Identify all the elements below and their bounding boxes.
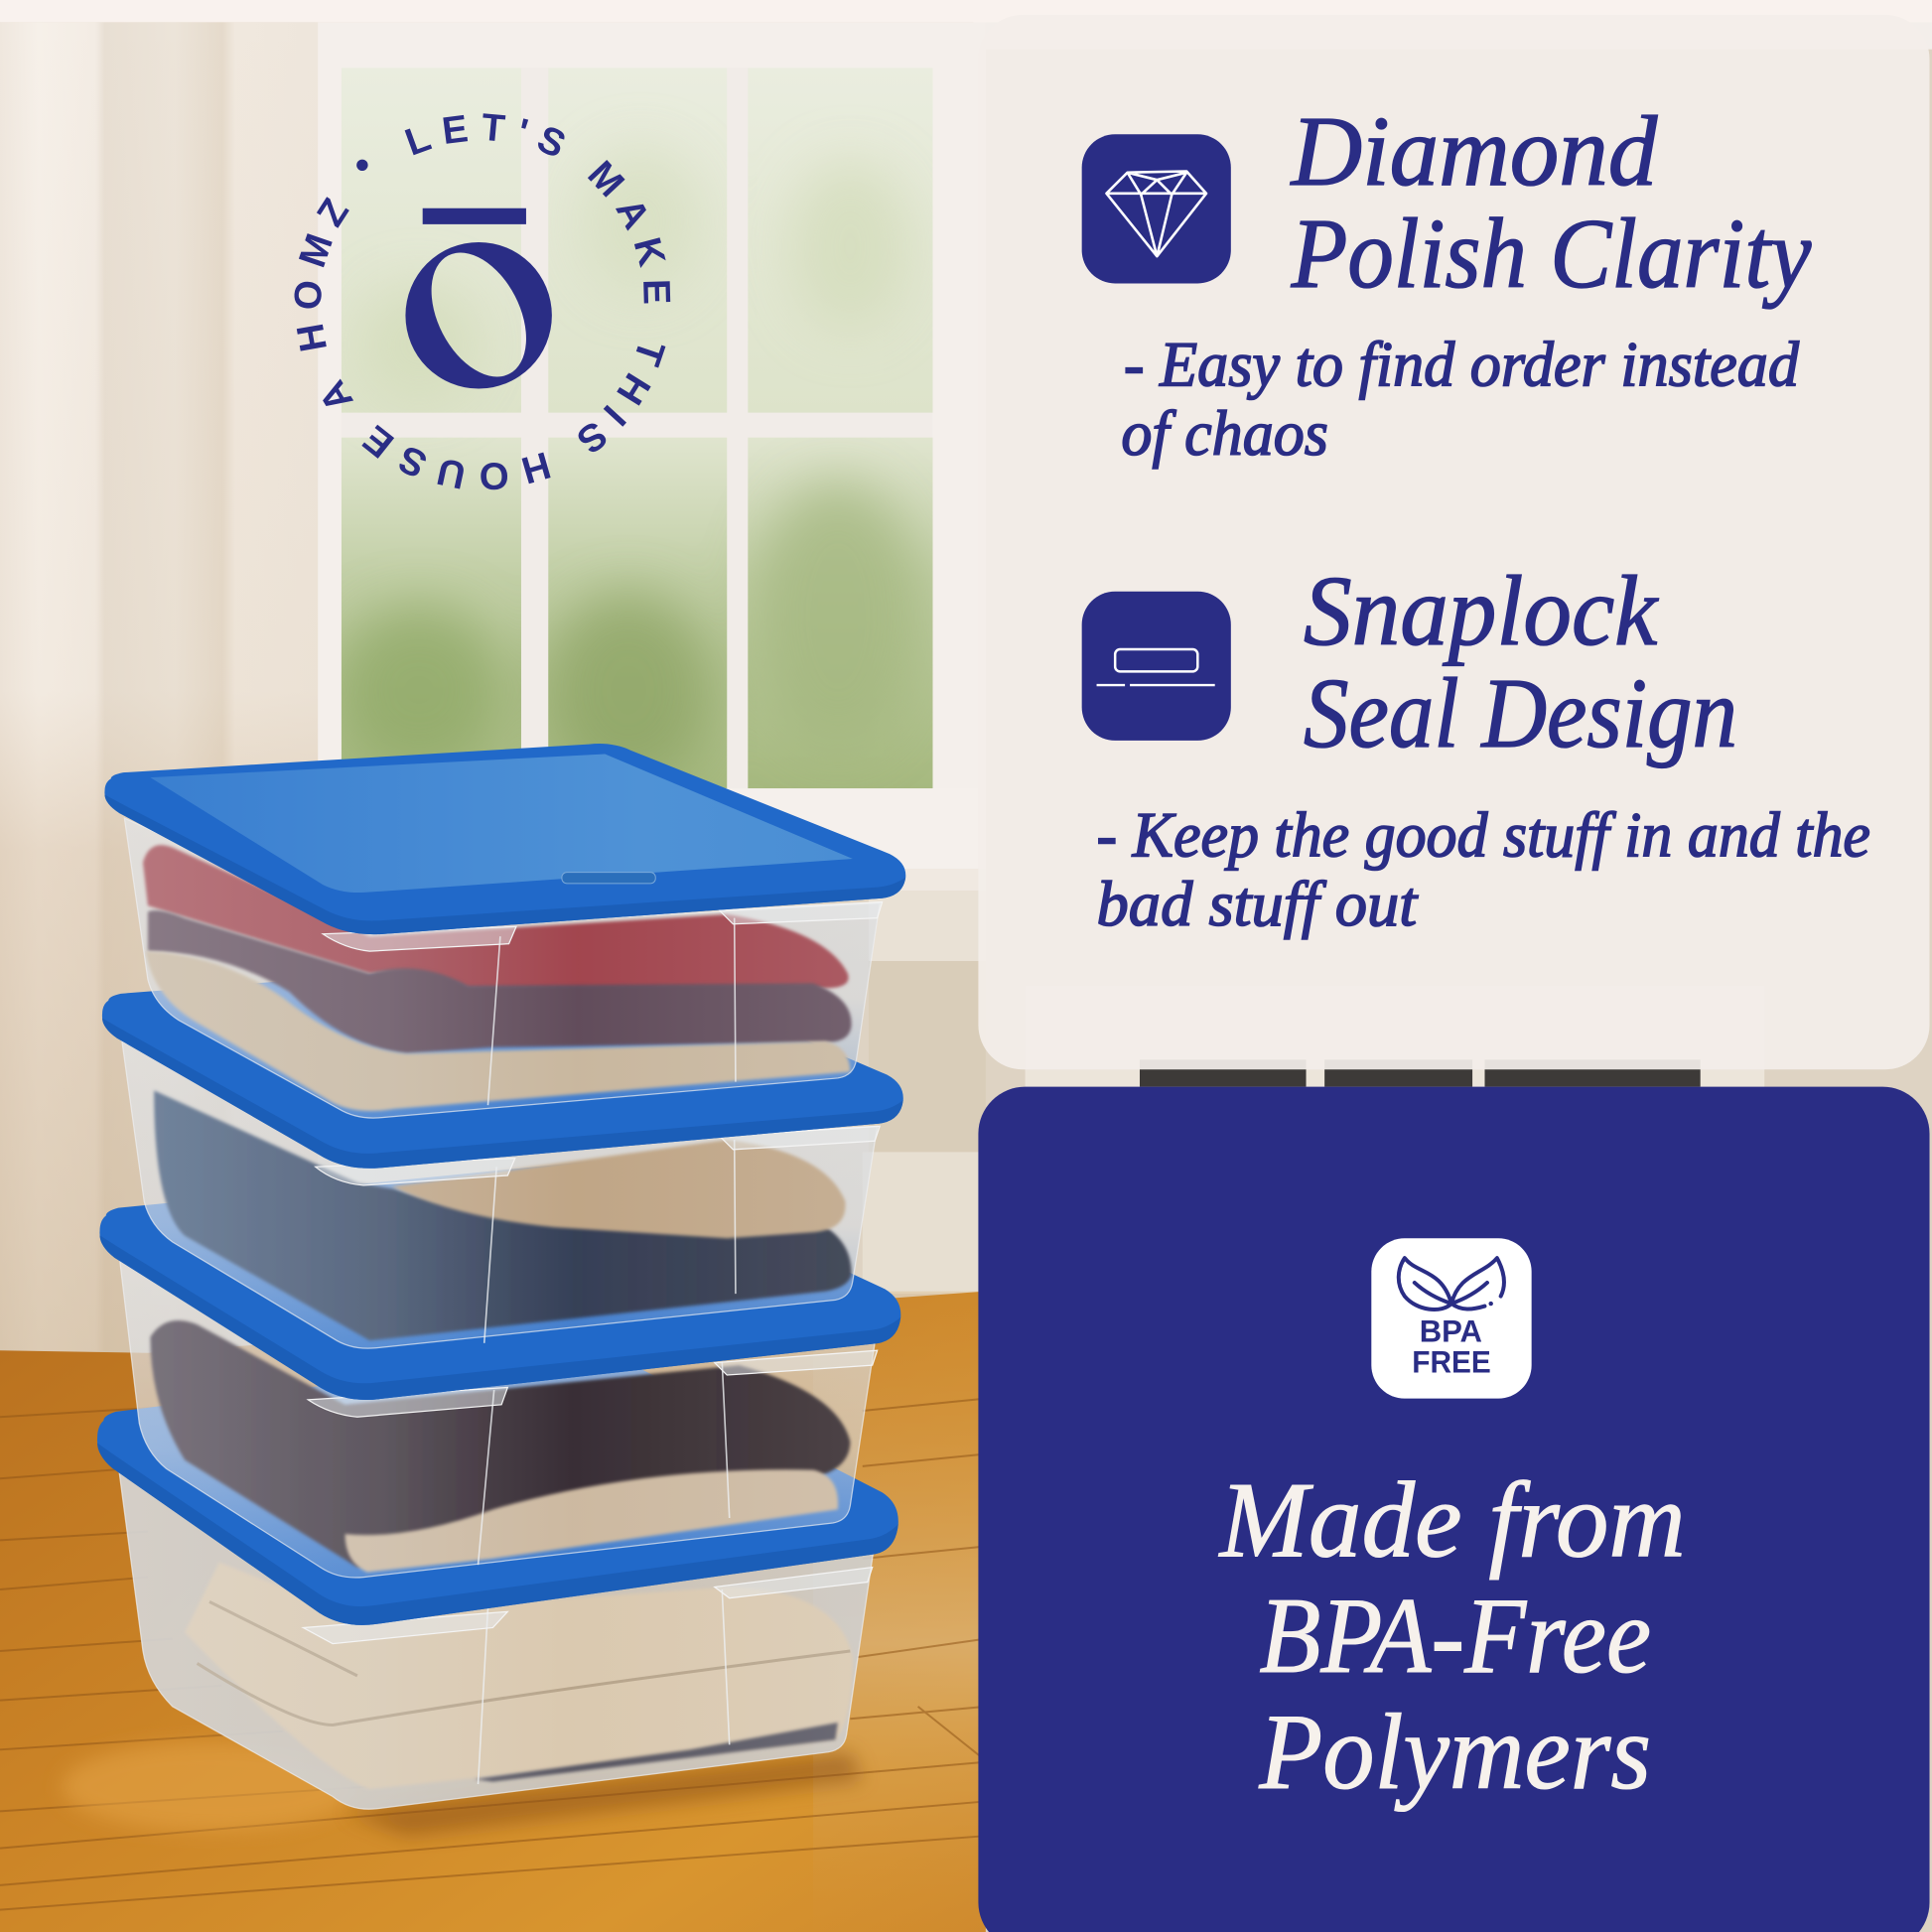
icon: diamond: [1082, 134, 1231, 283]
icon: bpa free leaves: [1371, 1238, 1532, 1399]
brand badge: let's make this house a homz: [294, 113, 671, 490]
wood floor: [0, 1292, 986, 1932]
wall vent: [1026, 986, 1764, 1090]
panel: bpa free: [978, 1087, 1930, 1932]
heading: diamond polish clarity: Diamond: [1290, 95, 1658, 207]
window sill and wall: [314, 788, 986, 1294]
panel: features: [978, 15, 1930, 1069]
text: keep the good stuff in: - Keep the good stuff in and the: [1097, 799, 1870, 871]
circular slogan text: LET'S MAKE THIS HOUSE A HOMZ: [294, 113, 671, 490]
heading: snaplock seal design: [1304, 555, 1737, 768]
curtain: [0, 22, 318, 1359]
logo bar: [423, 208, 526, 224]
heading: made from bpa-free polymers: Made from: [1218, 1459, 1686, 1580]
text: keep the good stuff in: [1097, 799, 1870, 939]
product: stacked storage boxes: [97, 744, 905, 1809]
box 3: [99, 1154, 900, 1578]
box 4 bottom: [97, 1339, 898, 1809]
lid top panel: [150, 755, 853, 893]
floor reflection: [62, 1742, 357, 1831]
text: easy to find order: [1121, 328, 1800, 469]
icon: bpa free leaves: FREE: [1412, 1345, 1491, 1380]
heading: made from bpa-free polymers: Polymers: [1258, 1692, 1651, 1812]
heading: snaplock seal design: Seal Design: [1304, 657, 1737, 768]
icon: bpa free leaves: BPA: [1420, 1314, 1482, 1349]
heading: snaplock seal design: Snaplock: [1304, 555, 1660, 666]
top strip: [0, 0, 1932, 22]
heading: diamond polish clarity: Polish Clarity: [1291, 198, 1812, 309]
heading: diamond polish clarity: [1290, 95, 1812, 309]
heading: made from bpa-free polymers: BPA-Free: [1259, 1576, 1651, 1696]
ring dot: [356, 160, 368, 171]
text: easy to find order: of chaos: [1121, 397, 1328, 469]
heading: made from bpa-free polymers: [1218, 1459, 1686, 1812]
window frame: [318, 22, 979, 788]
lid label: [562, 873, 655, 884]
box 2: [102, 954, 903, 1348]
box 1 top: [104, 744, 905, 1118]
text: easy to find order: - Easy to find order instead: [1124, 328, 1800, 399]
box shadow: [345, 1752, 863, 1836]
icon: snaplock seal: [1082, 592, 1231, 741]
logo letter o: [405, 242, 552, 388]
text: keep the good stuff in: bad stuff out: [1097, 868, 1419, 939]
